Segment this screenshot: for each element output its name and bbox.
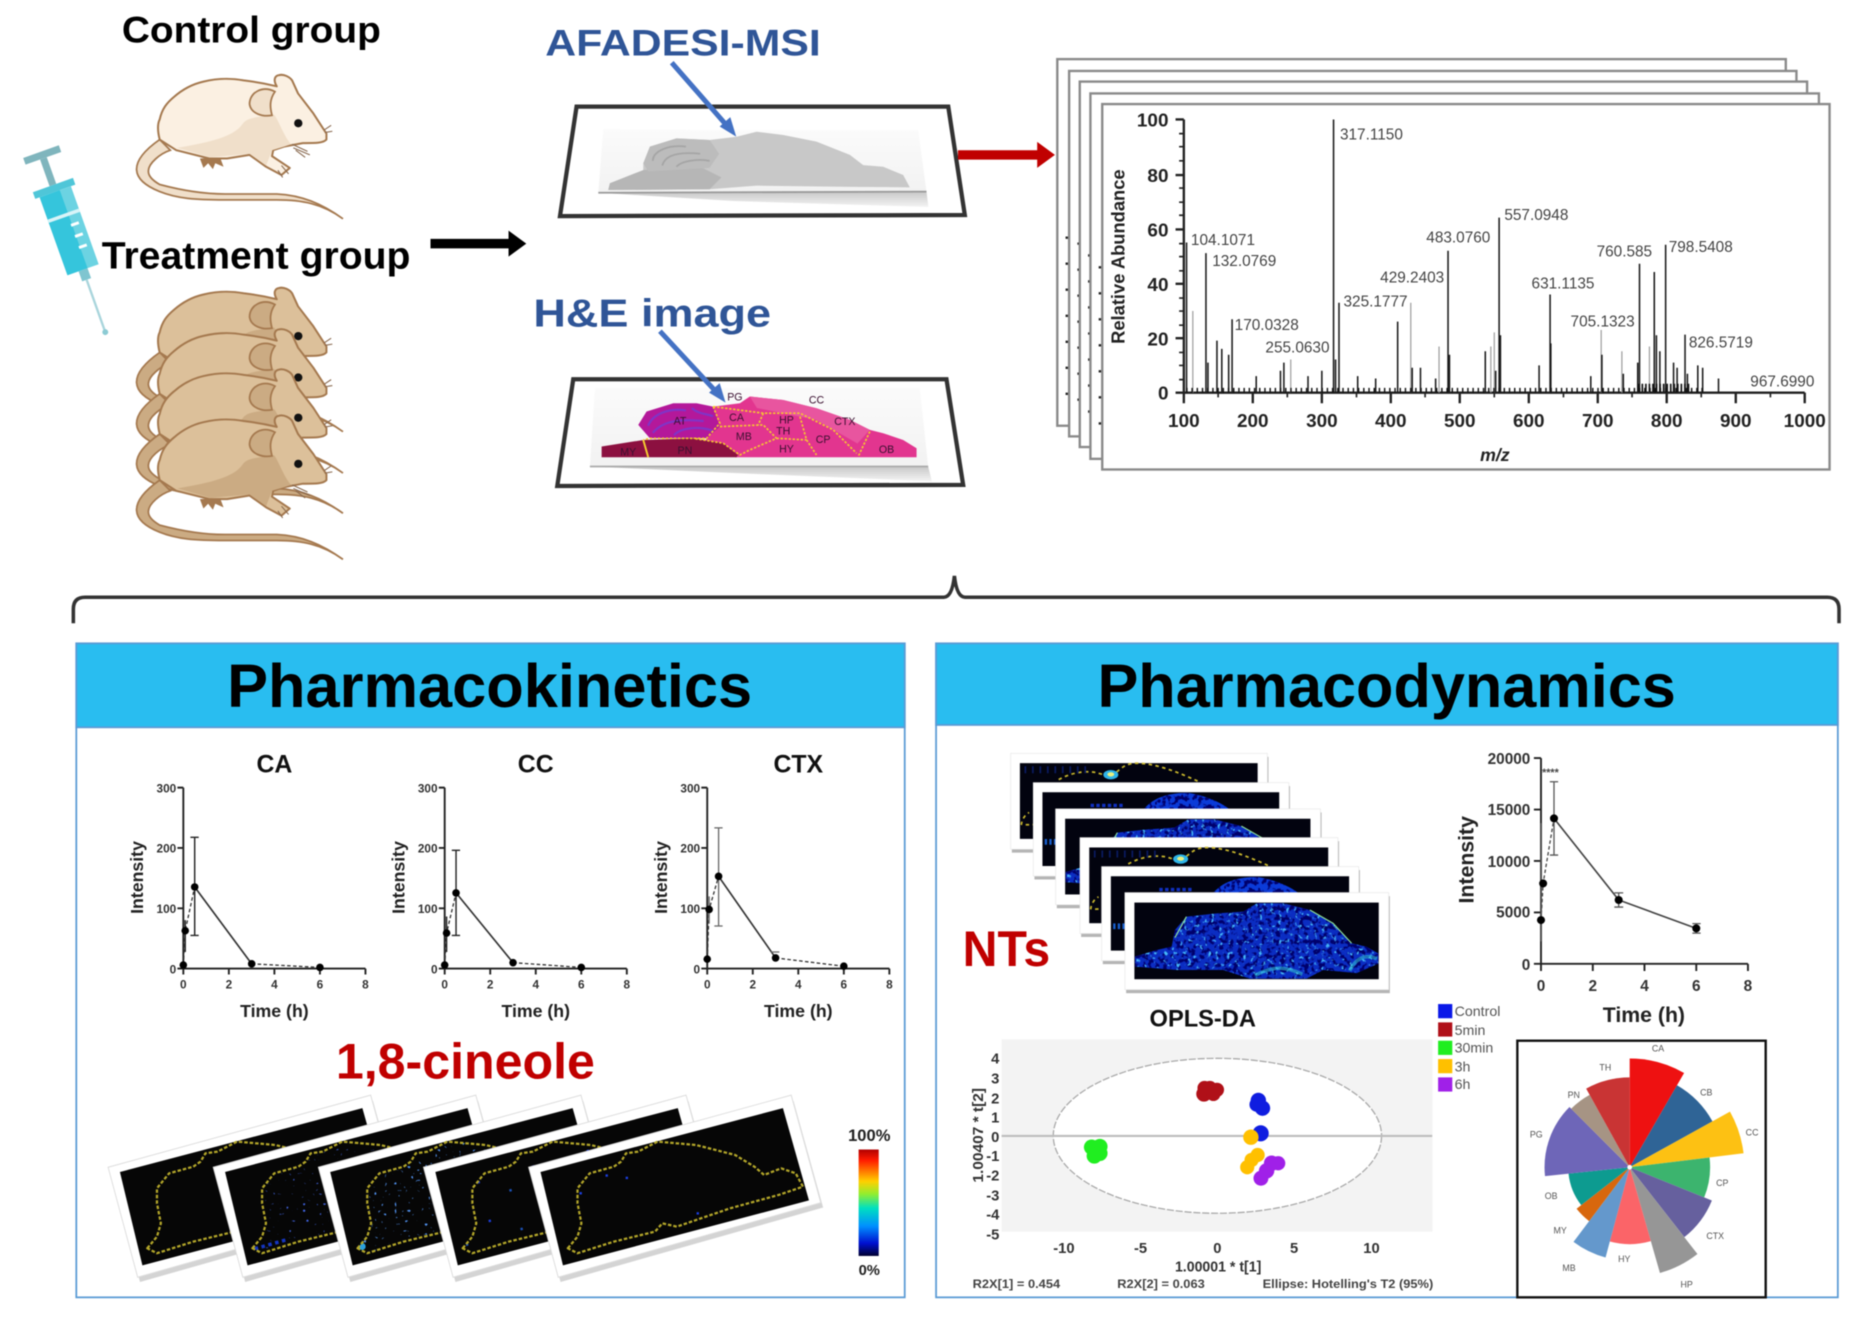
sector labels: PG	[1530, 1129, 1543, 1139]
spectrum tick labels: 60	[1147, 221, 1168, 242]
x tick labels	[1168, 411, 1826, 432]
peak labels	[1191, 127, 1814, 391]
header band	[936, 643, 1838, 725]
region labels: CP	[816, 434, 831, 446]
image 2	[213, 1095, 512, 1282]
peak labels: 255.0630	[1265, 339, 1329, 356]
back spectrum frame 4	[1090, 93, 1819, 459]
grey brain section	[608, 132, 910, 190]
spectrum peaks	[1193, 303, 1649, 393]
chart: CC: Time (h)	[501, 1001, 570, 1021]
x tick labels: 200	[1237, 411, 1269, 432]
chart: NT intensity over time: 5000	[1496, 905, 1530, 922]
region labels: MB	[736, 431, 752, 443]
chart: CA: 0	[180, 978, 187, 992]
colour scale: 100%	[848, 1126, 891, 1145]
chart: NT intensity over time: 20000	[1488, 751, 1530, 768]
sector labels: CA	[1652, 1043, 1664, 1053]
y axis title: Relative Abundance	[1108, 169, 1129, 344]
image 5	[529, 1095, 823, 1282]
x tick labels: 600	[1513, 411, 1545, 432]
peak labels: 429.2403	[1380, 270, 1444, 287]
panel: pharmacodynamics	[936, 643, 1838, 1297]
image 3	[318, 1095, 618, 1282]
region labels: OB	[879, 444, 894, 456]
sector labels: HY	[1618, 1254, 1630, 1264]
region labels: MY	[620, 446, 636, 458]
x tick labels: 400	[1375, 411, 1407, 432]
chart: CTX: 6	[841, 978, 848, 992]
legend: Control	[1455, 1004, 1500, 1020]
region labels: PN	[678, 445, 692, 457]
spectrum tick labels: 100	[1137, 111, 1168, 132]
model statistics	[973, 1277, 1433, 1291]
chart: NT intensity over time: ****	[1542, 767, 1560, 779]
chart: NT intensity over time	[1455, 751, 1753, 1027]
chart: CTX: 8	[886, 978, 893, 992]
NTs label: NTs	[963, 921, 1050, 977]
arrow: black to slides	[430, 231, 526, 257]
back spectrum frame 3	[1080, 82, 1807, 447]
peak labels: 483.0760	[1426, 229, 1490, 246]
region labels: TH	[776, 426, 790, 438]
chart: CA: 100	[157, 902, 177, 916]
chart: OPLS-DA score plot: 10	[1363, 1241, 1380, 1257]
region labels: PG	[727, 391, 743, 403]
chart: CA: 2	[226, 978, 233, 992]
image 1	[108, 1095, 403, 1282]
header band	[76, 643, 905, 727]
x tick labels: 1000	[1784, 411, 1826, 432]
sample clusters	[1196, 1081, 1224, 1102]
model statistics: Ellipse: Hotelling's T2 (95%)	[1263, 1277, 1433, 1291]
sector labels: TH	[1599, 1062, 1611, 1072]
image 4	[1080, 838, 1339, 937]
chart: CC: 0	[441, 978, 448, 992]
chart: NT intensity over time: 2	[1589, 978, 1597, 995]
chart: CTX: 100	[680, 902, 701, 916]
chart: CTX: 2	[749, 978, 756, 992]
heading: H&E image: H&E image	[533, 292, 771, 335]
NT ion images	[1011, 753, 1390, 993]
peak labels: 631.1135	[1532, 276, 1594, 293]
region labels	[620, 391, 894, 458]
image 1	[1011, 753, 1268, 853]
chart: OPLS-DA score plot: 2	[991, 1092, 999, 1108]
chart: mass spectra stack	[1057, 59, 1830, 470]
image 6	[1125, 893, 1390, 993]
spectrum tick labels	[1137, 111, 1168, 405]
chart: CTX: 0	[694, 962, 701, 976]
legend: 5min	[1455, 1023, 1485, 1039]
sector labels: MB	[1562, 1263, 1576, 1273]
arrow: blue pointer to H&E slide	[660, 331, 726, 403]
spectrum tick labels: 20	[1147, 329, 1168, 350]
image 3	[1056, 809, 1322, 908]
chart: CA: 200	[157, 842, 177, 856]
colour scale: 0%	[859, 1263, 880, 1279]
ion images: 1,8-cineole	[108, 1095, 823, 1282]
arrow: blue pointer to MSI slide	[672, 63, 736, 137]
chart: OPLS-DA score plot: -1	[986, 1149, 999, 1165]
sector labels: CB	[1700, 1088, 1713, 1098]
peak labels: 967.6990	[1750, 374, 1814, 391]
image 2	[1033, 783, 1290, 879]
region labels: AT	[674, 416, 687, 428]
bracket connecting the workflow to the panels	[73, 576, 1839, 623]
chart: OPLS-DA score plot: 1.00001 * t[1]	[1175, 1259, 1261, 1275]
x tick labels: 100	[1168, 411, 1200, 432]
chart: CC: 300	[418, 781, 438, 795]
panel title: Pharmacokinetics	[227, 652, 752, 721]
chart: CA: 4	[271, 978, 278, 992]
peak labels: 317.1150	[1340, 127, 1403, 144]
chart: CTX: 200	[680, 842, 701, 856]
region labels: HP	[779, 414, 794, 426]
x tick labels: 800	[1651, 411, 1682, 432]
chart: CC: 200	[418, 842, 438, 856]
chart: OPLS-DA score plot: -10	[1053, 1241, 1075, 1257]
back spectrum frame 3: 100	[1115, 89, 1147, 110]
region labels: HY	[779, 443, 794, 455]
chart: CTX: 0	[704, 978, 711, 992]
chart: NT intensity over time: 6	[1692, 978, 1701, 995]
region labels: CTX	[834, 416, 856, 428]
chart: OPLS-DA score plot: -3	[986, 1188, 999, 1204]
back spectrum frame 1: 100	[1093, 67, 1124, 88]
heading: AFADESI-MSI: AFADESI-MSI	[545, 23, 821, 64]
sector labels: OB	[1545, 1191, 1558, 1201]
front spectrum frame	[1102, 104, 1830, 470]
chart: OPLS-DA score plot: -4	[986, 1208, 1000, 1224]
sector labels: PN	[1568, 1090, 1580, 1100]
panel title: Pharmacodynamics	[1098, 652, 1676, 721]
panel: MSI slide	[560, 107, 965, 216]
chart: CA: Intensity	[127, 841, 147, 914]
chart: OPLS-DA score plot: 1.00407 * t[2]	[971, 1088, 987, 1183]
chart: OPLS-DA score plot: -5	[1134, 1241, 1147, 1257]
x axis title: m/z	[1480, 445, 1510, 465]
chart: NT intensity over time: 0	[1522, 957, 1530, 974]
sector labels: CTX	[1706, 1231, 1724, 1241]
chart: CC: 6	[578, 978, 585, 992]
sector labels: CC	[1746, 1127, 1759, 1137]
chart: CA: Time (h)	[240, 1001, 309, 1021]
icon: control mouse	[137, 75, 343, 219]
chart: OPLS-DA score plot: 1	[991, 1111, 999, 1127]
spectrum tick labels: 40	[1147, 275, 1168, 296]
image 5	[1102, 867, 1360, 964]
chart: NT intensity over time: 10000	[1488, 854, 1530, 871]
chart: OPLS-DA score plot: 0	[1213, 1241, 1221, 1257]
chart: OPLS-DA score plot: 5	[1290, 1241, 1298, 1257]
model statistics: R2X[2] = 0.063	[1117, 1277, 1205, 1291]
back spectrum frame 2	[1069, 71, 1796, 436]
arrow: red to spectra	[958, 142, 1055, 168]
sector labels: CP	[1716, 1178, 1729, 1188]
sector labels: HP	[1681, 1279, 1693, 1289]
legend	[1438, 1004, 1500, 1093]
sector labels	[1530, 1043, 1759, 1289]
x tick labels: 700	[1582, 411, 1614, 432]
chart: CC: CC	[518, 751, 554, 778]
chart: NT intensity over time: 8	[1744, 978, 1753, 995]
spectrum axes	[1176, 119, 1805, 403]
chart: CC: 4	[532, 978, 539, 992]
chart: CC: Intensity	[388, 841, 408, 914]
peak labels: 104.1071	[1191, 232, 1255, 249]
chart: OPLS-DA score plot	[971, 1039, 1433, 1291]
chart: NT intensity over time: 4	[1640, 978, 1649, 995]
peak labels: 798.5408	[1669, 239, 1733, 256]
chart: NT intensity over time: Intensity	[1455, 816, 1479, 904]
image 4	[424, 1095, 723, 1282]
chart: CTX: Intensity	[651, 841, 671, 914]
chart: CC: 100	[418, 902, 438, 916]
stained brain section	[706, 397, 917, 457]
panel: H&E slide	[557, 379, 963, 486]
heading: treatment group: Treatment group	[102, 235, 410, 277]
chart: CTX: CTX	[773, 751, 824, 778]
chart: CA: 300	[157, 781, 177, 795]
back spectrum frame 4: 100	[1126, 101, 1157, 122]
chart: CA	[127, 751, 369, 1021]
legend: 6h	[1455, 1077, 1470, 1093]
x tick labels: 300	[1306, 411, 1338, 432]
region labels: CC	[809, 394, 825, 406]
peak labels: 557.0948	[1504, 207, 1568, 224]
chart: CC: 2	[487, 978, 494, 992]
chart: CA: CA	[256, 751, 292, 778]
legend: 30min	[1455, 1041, 1493, 1057]
x tick labels: 500	[1444, 411, 1476, 432]
chart: CTX: 4	[795, 978, 802, 992]
heading: OPLS-DA: OPLS-DA	[1150, 1007, 1256, 1033]
chart: OPLS-DA score plot: 3	[991, 1072, 999, 1088]
chart: CA: 8	[362, 978, 369, 992]
peak labels: 705.1323	[1571, 313, 1635, 330]
chart: OPLS-DA score plot: -2	[986, 1169, 999, 1185]
sector labels: MY	[1554, 1226, 1567, 1236]
chart: OPLS-DA score plot: -5	[986, 1227, 999, 1243]
chart: CTX	[651, 751, 893, 1021]
chart: CC	[388, 751, 631, 1021]
compound name: 1,8-cineole	[336, 1034, 595, 1090]
chart: NT intensity over time: 15000	[1488, 802, 1530, 819]
x tick labels: 900	[1720, 411, 1752, 432]
back spectrum frame 2: 100	[1105, 79, 1136, 100]
heading: control group: Control group	[122, 10, 381, 51]
back spectrum frame 1	[1057, 59, 1786, 426]
chart: OPLS-DA score plot: 0	[991, 1130, 999, 1146]
chart: CA: 6	[317, 978, 324, 992]
legend: 3h	[1455, 1059, 1470, 1075]
icon: syringe	[21, 145, 126, 342]
peak labels: 170.0328	[1235, 317, 1299, 334]
chart: CA: 0	[170, 962, 177, 976]
colour scale	[848, 1126, 891, 1279]
chart: NT intensity over time: Time (h)	[1603, 1003, 1685, 1027]
chart: CC: 8	[624, 978, 631, 992]
chart: rose plot of brain regions	[1517, 1041, 1766, 1297]
chart: CC: 0	[431, 962, 438, 976]
chart: NT intensity over time: 0	[1537, 978, 1545, 995]
peak labels: 132.0769	[1212, 253, 1276, 270]
peak labels: 325.1777	[1343, 293, 1408, 310]
spectrum tick labels: 80	[1147, 166, 1168, 187]
region labels: CA	[729, 412, 745, 424]
chart: OPLS-DA score plot: 4	[991, 1052, 1000, 1068]
chart: CTX: Time (h)	[764, 1001, 833, 1021]
model statistics: R2X[1] = 0.454	[973, 1277, 1060, 1291]
peak labels: 760.585	[1597, 244, 1652, 261]
peak labels: 826.5719	[1689, 335, 1753, 352]
spectrum tick labels: 0	[1158, 384, 1168, 405]
chart: CTX: 300	[680, 781, 701, 795]
icon: treatment mice stack	[137, 288, 343, 559]
panel: pharmacokinetics	[76, 643, 905, 1297]
